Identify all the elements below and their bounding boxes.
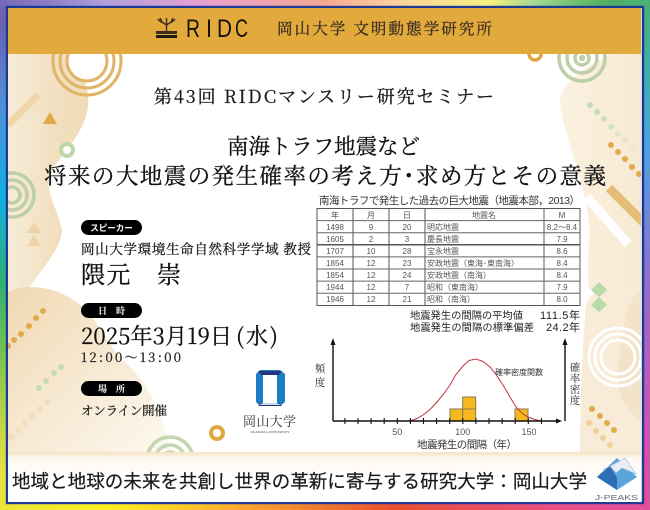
- table: past Nankai Trough earthquakes: 安政地震（南海）: [427, 270, 491, 280]
- green diamonds: [591, 282, 607, 312]
- main heading: 南海トラフ地震など: [227, 135, 420, 159]
- footer band: [8, 452, 641, 502]
- table: past Nankai Trough earthquakes: 10: [367, 247, 376, 256]
- frequency label: 度: [315, 376, 326, 389]
- institute name: 岡山大学 文明動態学研究所: [277, 20, 492, 38]
- right lower blob: [580, 284, 641, 452]
- panel: venue: [81, 381, 167, 418]
- table: past Nankai Trough earthquakes: 3: [405, 235, 410, 244]
- table: past Nankai Trough earthquakes: 8.6: [556, 247, 568, 256]
- speaker pill: [81, 220, 142, 235]
- probability density label: 確: [570, 362, 581, 374]
- green target left: [8, 171, 36, 219]
- table: past Nankai Trough earthquakes: 1605: [326, 235, 344, 244]
- RIDC wordmark: [186, 15, 248, 43]
- gold ring bottom: [211, 427, 223, 439]
- gold rings top left: [52, 54, 122, 96]
- table: past Nankai Trough earthquakes: 1946: [326, 295, 344, 304]
- seminar title: 第43回 RIDCマンスリー研究セミナー: [154, 83, 494, 109]
- axis tick labels: 150: [521, 427, 537, 437]
- table: past Nankai Trough earthquakes: 23: [403, 259, 412, 268]
- probability density label: 度: [570, 394, 581, 407]
- table: past Nankai Trough earthquakes: 12: [367, 283, 376, 292]
- table: past Nankai Trough earthquakes: 月: [367, 211, 375, 220]
- icon: RIDC tree logo: [156, 18, 177, 38]
- footer slogan: 地域と地球の未来を共創し世界の革新に寄与する研究大学：岡山大学: [12, 471, 587, 492]
- table: past Nankai Trough earthquakes: 地震名: [472, 210, 496, 220]
- header band: [8, 8, 641, 54]
- main heading: [44, 135, 606, 189]
- interval statistics: [410, 308, 580, 334]
- left vertical axis: [330, 338, 336, 421]
- table: past Nankai Trough earthquakes: 8.4: [556, 259, 568, 268]
- probability density label: [570, 362, 581, 407]
- Okayama University logo: 岡山大学: [243, 414, 296, 429]
- speaker pill: スピーカー: [90, 223, 133, 233]
- gold dots right: [608, 142, 642, 177]
- background decoration: [8, 54, 641, 452]
- left upper blob: [8, 54, 88, 300]
- table: past Nankai Trough earthquakes: 慶長地震: [427, 234, 459, 244]
- green dots right: [587, 102, 635, 150]
- panel: date and time: [81, 303, 278, 366]
- axis tick labels: [392, 427, 537, 437]
- table: past Nankai Trough earthquakes: 年: [331, 210, 339, 220]
- table: past Nankai Trough earthquakes: 1854: [326, 259, 344, 268]
- light triangles: [27, 222, 41, 246]
- table: past Nankai Trough earthquakes: 2: [369, 235, 374, 244]
- green dots left: [36, 364, 64, 391]
- white and gold slashes right: [587, 197, 628, 244]
- table: past Nankai Trough earthquakes: 7.9: [556, 235, 568, 244]
- frequency label: [315, 362, 326, 389]
- venue pill: 場 所: [98, 383, 125, 394]
- speaker affiliation: 岡山大学環境生命自然科学学域 教授: [81, 241, 312, 257]
- table: past Nankai Trough earthquakes: 日: [403, 211, 411, 220]
- peach dots left: [8, 399, 50, 440]
- chart: earthquake interval histogram: [315, 338, 581, 451]
- table: past Nankai Trough earthquakes: 21: [403, 295, 412, 304]
- probability density label: 密: [570, 383, 581, 396]
- table: past Nankai Trough earthquakes: M: [559, 211, 566, 220]
- RIDC wordmark: D: [217, 15, 232, 43]
- RIDC wordmark: C: [235, 15, 248, 43]
- table: past Nankai Trough earthquakes: 1854: [326, 271, 344, 280]
- table: past Nankai Trough earthquakes: 昭和（東南海）: [427, 282, 483, 292]
- date pill: [81, 303, 142, 318]
- time: 12:00～13:00: [81, 347, 181, 366]
- main heading: 将来の大地震の発生確率の考え方･求め方とその意義: [44, 164, 606, 189]
- green target bottom: [146, 435, 194, 452]
- interval statistics: 地震発生の間隔の標準偏差: [410, 321, 534, 334]
- table: past Nankai Trough earthquakes: 9: [369, 223, 374, 232]
- table: past Nankai Trough earthquakes: 7: [405, 283, 410, 292]
- table: past Nankai Trough earthquakes: 8.0: [556, 295, 568, 304]
- table: past Nankai Trough earthquakes: 8.4: [556, 271, 568, 280]
- speaker name: 隈元 崇: [81, 262, 181, 289]
- density curve: [410, 359, 541, 421]
- gold slash left: [8, 95, 38, 125]
- table: past Nankai Trough earthquakes: 12: [367, 295, 376, 304]
- left lower blob: [8, 287, 170, 452]
- RIDC wordmark: I: [206, 15, 212, 43]
- table title: 南海トラフで発生した過去の巨大地震（地震本部，2013）: [319, 194, 580, 207]
- Okayama University logo: [243, 370, 296, 434]
- green ring left: [61, 144, 73, 156]
- table: past Nankai Trough earthquakes: 28: [403, 247, 412, 256]
- table: past Nankai Trough earthquakes: 20: [403, 223, 412, 232]
- table: past Nankai Trough earthquakes: 1707: [326, 247, 344, 256]
- density curve label: 確率密度関数: [495, 367, 543, 377]
- right vertical axis: [562, 338, 568, 421]
- dot cluster lower right: [586, 406, 617, 448]
- green target right: [557, 54, 607, 83]
- RIDC wordmark: R: [186, 15, 200, 43]
- venue text: オンライン開催: [81, 403, 167, 418]
- axis tick labels: 100: [455, 427, 470, 437]
- x axis label: 地震発生の間隔（年）: [417, 438, 517, 451]
- table: past Nankai Trough earthquakes: 12: [367, 271, 376, 280]
- date pill: 日 時: [98, 305, 125, 316]
- table: past Nankai Trough earthquakes: 1498: [326, 223, 344, 232]
- panel: speaker: [81, 220, 312, 289]
- date: (水): [236, 320, 278, 351]
- table: past Nankai Trough earthquakes: [317, 194, 580, 306]
- table: past Nankai Trough earthquakes: 宝永地震: [427, 246, 459, 256]
- white concentric rings right: [589, 328, 647, 386]
- gold dots left: [5, 308, 46, 349]
- date: 2025年3月19日: [81, 320, 232, 351]
- table: past Nankai Trough earthquakes: 安政地震（東海･東南海）: [427, 258, 519, 268]
- table: past Nankai Trough earthquakes: 明応地震: [427, 222, 459, 232]
- gold ring top: [527, 54, 543, 62]
- table: past Nankai Trough earthquakes: 12: [367, 259, 376, 268]
- table: past Nankai Trough earthquakes: 8.2～8.4: [547, 223, 578, 232]
- histogram bars: [450, 397, 528, 421]
- interval statistics: 地震発生の間隔の平均値: [410, 309, 523, 322]
- frequency label: 頻: [315, 362, 326, 375]
- triangle: [43, 112, 57, 124]
- J-PEAKS logo: J-PEAKS: [595, 493, 638, 502]
- interval statistics: 111.5年: [540, 308, 580, 322]
- table: past Nankai Trough earthquakes: 7.9: [556, 283, 568, 292]
- axis tick labels: 50: [392, 427, 402, 437]
- right upper blob: [560, 54, 641, 290]
- table: past Nankai Trough earthquakes: 24: [403, 271, 412, 280]
- Okayama University logo: OKAYAMA UNIVERSITY: [250, 430, 290, 434]
- table: past Nankai Trough earthquakes: 1944: [326, 283, 344, 292]
- x axis: [333, 418, 558, 424]
- interval statistics: 24.2年: [546, 320, 580, 334]
- probability density label: 率: [570, 372, 581, 385]
- table: past Nankai Trough earthquakes: 昭和（南海）: [427, 294, 475, 304]
- J-PEAKS logo: [595, 458, 638, 502]
